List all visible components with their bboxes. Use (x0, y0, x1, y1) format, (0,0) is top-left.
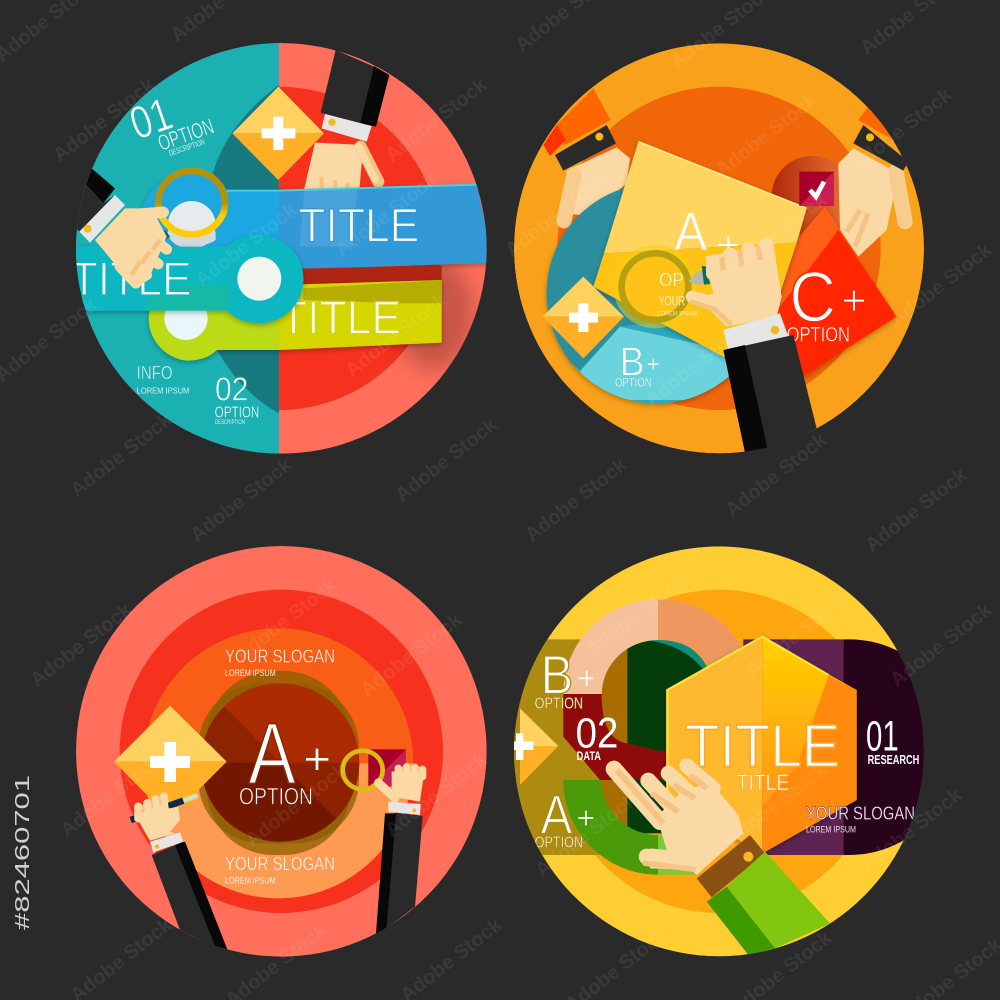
icon: plus diamond (114, 706, 227, 818)
top hand with sleeve (304, 50, 389, 190)
text: teal banner title: TITLE (71, 253, 192, 306)
panel: circle 1 teal and coral (63, 40, 493, 457)
icon: magnifier (157, 171, 225, 242)
watermark: Adobe Stock: Adobe Stock (521, 453, 632, 547)
icon: magnifier (613, 245, 710, 328)
watermark: Adobe Stock: Adobe Stock (861, 463, 972, 557)
text: C plus option (787, 272, 864, 342)
text block: info: LOREM IPSUM (137, 386, 189, 396)
ring: green segment (563, 780, 697, 875)
watermark: Adobe Stock: Adobe Stock (721, 188, 832, 282)
white circle behind magnifier (168, 201, 216, 249)
red inner half disc (279, 87, 441, 410)
magnifier text over lens: LOREM IPSUM (658, 312, 697, 318)
text: 02 data: 02 (576, 709, 618, 757)
watermark: Adobe Stock: Adobe Stock (721, 758, 832, 852)
text: A plus option (535, 783, 593, 851)
text block: 02 option: 02 (215, 372, 248, 409)
left hand with cuff (63, 168, 167, 288)
watermark: Adobe Stock: Adobe Stock (231, 573, 342, 667)
teal banner (70, 235, 303, 323)
text: C plus option: OPTION (787, 323, 850, 347)
watermark: Adobe Stock: Adobe Stock (186, 453, 297, 547)
text block: 02 option: DESCRIPTION (215, 419, 245, 426)
text: A plus option: OPTION (535, 834, 583, 851)
top right hand (838, 107, 908, 257)
watermark: Adobe Stock: Adobe Stock (581, 568, 692, 662)
text: bottom slogan (225, 853, 335, 885)
watermark: Adobe Stock: Adobe Stock (49, 73, 160, 167)
left arrow with plus (510, 708, 558, 785)
olive left banner (510, 639, 627, 855)
text: 02 data: DATA (577, 749, 601, 763)
watermark: Adobe Stock: Adobe Stock (331, 168, 442, 262)
hand with green sleeve (614, 766, 830, 955)
text block: 02 option (215, 376, 258, 424)
text: grade A plus: A (248, 704, 296, 802)
watermark: Adobe Stock: Adobe Stock (381, 73, 492, 167)
watermark: Adobe Stock: Adobe Stock (531, 788, 642, 882)
watermark: Adobe Stock: Adobe Stock (241, 758, 352, 852)
red diamond (777, 207, 897, 377)
watermark: Adobe Stock: Adobe Stock (846, 83, 957, 177)
text: A plus (674, 213, 738, 250)
text: B plus option: B (541, 643, 573, 705)
text block: 01 option (131, 100, 214, 156)
olive overlay shapes (198, 671, 359, 855)
magnifier text over lens: OP (659, 269, 684, 290)
text: slogan: YOUR SLOGAN (806, 802, 915, 823)
orange base circle (514, 43, 924, 453)
icon: check box (368, 749, 406, 787)
stock number vertical text: #82460701 (12, 775, 34, 930)
blue disc (544, 188, 756, 408)
text block: 01 option: 01 (123, 87, 179, 149)
dark teal inner shape (212, 85, 279, 413)
yellow base circle (514, 546, 924, 956)
watermark: Adobe Stock: Adobe Stock (391, 413, 502, 507)
panel: circle 3 coral slogan (76, 546, 487, 957)
coral base circle (76, 546, 487, 957)
red ring (120, 590, 443, 913)
watermark: Adobe Stock: Adobe Stock (856, 783, 967, 877)
text: C plus option: C (789, 258, 836, 338)
watermark: Adobe Stock: Adobe Stock (711, 88, 822, 182)
magnifier text over lens: YOUR (658, 293, 685, 309)
hexagon (667, 637, 857, 853)
text: bottom slogan: LOREM IPSUM (225, 875, 276, 885)
orange inner circle (557, 590, 881, 913)
red circle behind check (772, 156, 840, 234)
text: B plus option: OPTION (615, 376, 652, 390)
text: green banner title: TITLE (280, 291, 401, 343)
panel: circle 2 orange (514, 43, 924, 457)
text: slogan: LOREM IPSUM (806, 825, 856, 835)
banner shadow on red (302, 265, 442, 284)
watermark: Adobe Stock: Adobe Stock (26, 598, 137, 692)
yellow square card (593, 142, 807, 360)
text: top slogan: YOUR SLOGAN (225, 646, 335, 667)
text: hexagon title: TITLE (685, 712, 840, 780)
watermark: Adobe Stock: Adobe Stock (56, 748, 167, 842)
ring: inner fill (602, 639, 710, 835)
icon: plus diamond (543, 277, 624, 358)
text: B plus option: OPTION (535, 696, 583, 713)
blue lens fill (165, 180, 218, 213)
blue banner (140, 173, 493, 269)
right hand (376, 766, 425, 933)
watermark: Adobe Stock: Adobe Stock (641, 318, 752, 412)
watermark: Adobe Stock: Adobe Stock (501, 168, 612, 262)
watermark: Adobe Stock: Adobe Stock (66, 408, 177, 502)
text: A plus: A (674, 203, 707, 262)
dark orange inner circle (557, 87, 881, 410)
text: B plus option: B (620, 339, 645, 385)
left hand with pencil (131, 795, 227, 949)
text: slogan (806, 802, 915, 835)
ring: salmon segment (658, 599, 743, 673)
watermark: Adobe Stock: Adobe Stock (886, 598, 997, 692)
watermark: Adobe Stock: Adobe Stock (741, 588, 852, 682)
lower right soft shadow (393, 257, 473, 370)
ring: red segment (563, 694, 670, 780)
orange disc (143, 628, 413, 898)
peach lower disc (143, 763, 413, 898)
text block: info (137, 362, 189, 396)
text: grade A plus: OPTION (239, 783, 313, 810)
text block: 01 option: OPTION (155, 113, 217, 156)
purple banner (743, 639, 957, 855)
text: top slogan: LOREM IPSUM (225, 668, 276, 678)
watermark: Adobe Stock: Adobe Stock (721, 428, 832, 522)
teal left half (70, 40, 279, 457)
text: 01 research: RESEARCH (868, 752, 919, 767)
text block: 02 option: OPTION (215, 405, 259, 422)
watermark: Adobe Stock: Adobe Stock (381, 748, 492, 842)
text: A plus option: A (541, 783, 573, 845)
text: blue banner title: TITLE (298, 200, 419, 253)
text: hexagon title: TITLE (737, 770, 789, 795)
magnifier text over lens (658, 273, 696, 316)
icon: check box (799, 172, 834, 206)
top left hand (543, 88, 630, 221)
text: 01 research: 01 (866, 713, 899, 761)
watermark: Adobe Stock: Adobe Stock (341, 288, 452, 382)
panel: circle 4 yellow hexagon (510, 546, 957, 956)
ring: peach segment (563, 599, 658, 694)
text block: info: INFO (137, 362, 173, 383)
watermark: Adobe Stock: Adobe Stock (886, 238, 997, 332)
text: B plus option (615, 348, 659, 386)
text: bottom slogan: YOUR SLOGAN (225, 853, 335, 874)
coral base circle (76, 43, 487, 454)
watermark: Adobe Stock: Adobe Stock (356, 608, 467, 702)
text: grade A plus (239, 704, 328, 810)
green banner (149, 276, 442, 361)
main hand with sleeve (687, 243, 817, 457)
text block: 01 option: DESCRIPTION (168, 137, 206, 158)
text: B plus option (535, 643, 593, 713)
dark central circle (201, 683, 359, 842)
icon: yellow plus diamond (232, 87, 324, 180)
watermark: Adobe Stock: Adobe Stock (191, 198, 302, 292)
icon: magnifier (343, 751, 383, 789)
text: top slogan (225, 646, 335, 678)
